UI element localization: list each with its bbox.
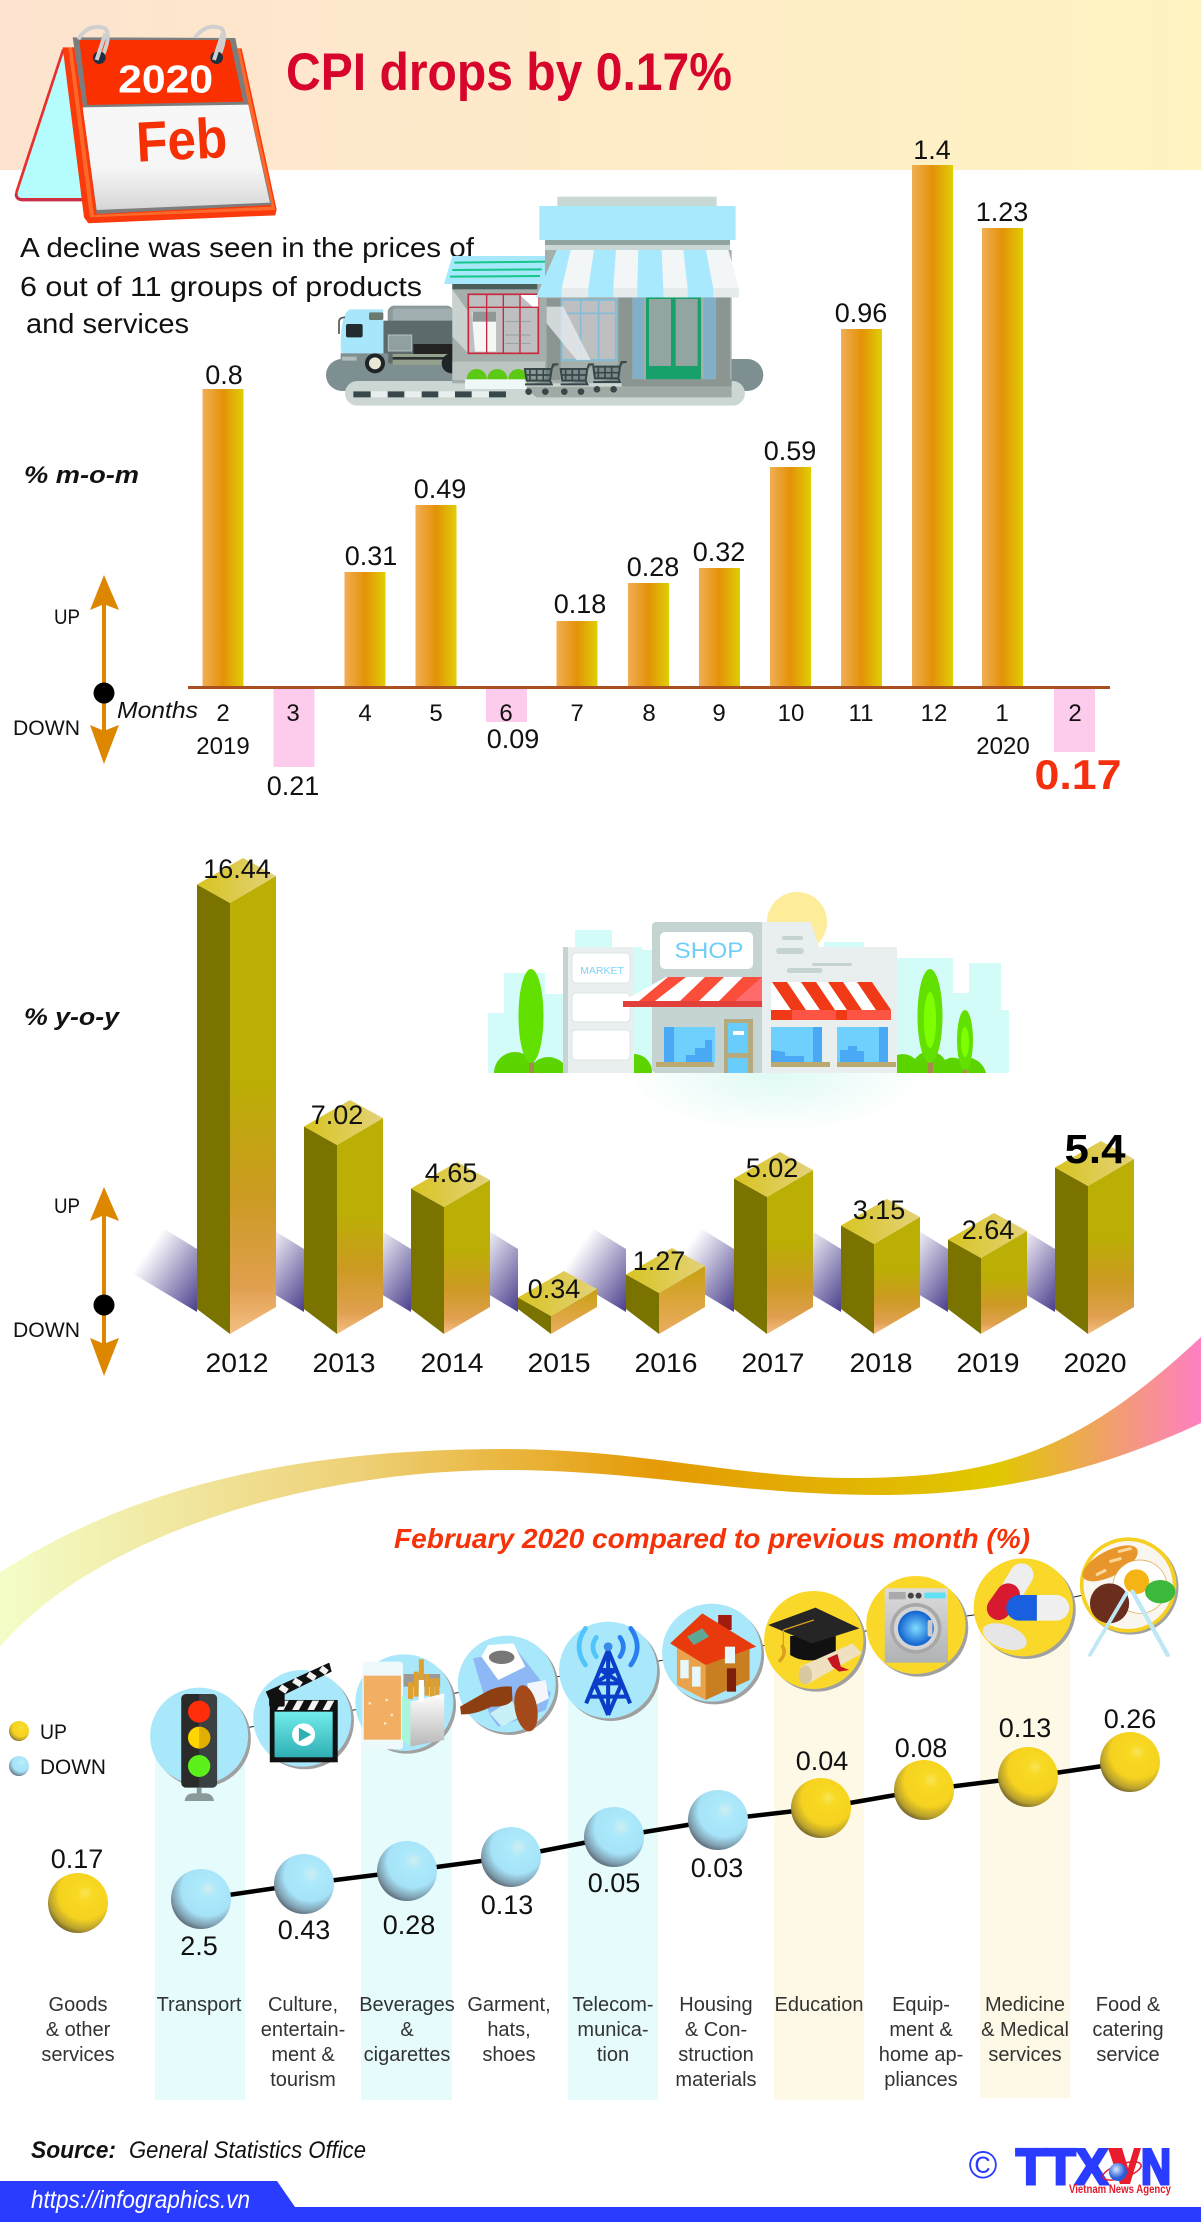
icon: clapperboard (253, 1663, 354, 1769)
chart: yearly CPI 3D columns: 2019 (956, 1348, 1020, 1378)
category labels: materials (675, 2069, 757, 2091)
legend: DOWN (40, 1756, 106, 1779)
up/down axis arrow: yearly (13, 1187, 119, 1376)
illustration: shop street: MARKET (580, 965, 624, 977)
category labels: shoes (482, 2044, 536, 2066)
chart: yearly CPI 3D columns: 2013 (312, 1348, 376, 1378)
line chart: change by group: 0.26 (1104, 1704, 1156, 1734)
icons row, left group (150, 1622, 660, 1801)
source line (31, 2137, 366, 2164)
chart: yearly CPI 3D columns: 2012 (206, 1348, 268, 1378)
chart: yearly CPI 3D columns: 2017 (742, 1348, 804, 1378)
chart: monthly CPI bars: 11 (849, 700, 873, 727)
logo: TTXVN: N (1141, 2139, 1171, 2195)
category labels: hats, (487, 2019, 531, 2041)
category labels: struction (678, 2044, 754, 2066)
chart: monthly CPI bars: Months (117, 697, 199, 723)
category labels: Garment, (467, 1994, 551, 2016)
up/down axis arrow: yearly: UP (54, 1195, 80, 1218)
source line: General Statistics Office (129, 2137, 366, 2164)
category labels: home ap- (879, 2044, 963, 2066)
icon: drink and cigarettes (355, 1654, 456, 1754)
chart: monthly CPI bars: 0.59 (764, 436, 816, 466)
category labels: Medicine (985, 1994, 1065, 2016)
chart: yearly CPI 3D columns: 2016 (634, 1348, 698, 1378)
intro text: and services (26, 308, 189, 339)
chart: yearly CPI 3D columns: 1.27 (633, 1246, 685, 1276)
chart: monthly CPI bars: 9 (712, 700, 726, 727)
chart: yearly CPI 3D columns: 2018 (850, 1348, 912, 1378)
up/down axis arrow: monthly: DOWN (13, 717, 80, 740)
label: % y-o-y: % y-o-y (24, 1004, 121, 1031)
category labels: ment & (271, 2044, 335, 2066)
line chart: change by group: 0.13 (999, 1713, 1051, 1743)
chart: yearly CPI 3D columns (132, 854, 1134, 1378)
chart: yearly CPI 3D columns: 5.4 (1064, 1126, 1126, 1172)
category labels: catering (1092, 2019, 1164, 2041)
category labels: ment & (889, 2019, 953, 2041)
chart: yearly CPI 3D columns: 16.44 (203, 854, 271, 884)
category labels: cigarettes (364, 2044, 450, 2066)
up/down axis arrow: yearly: DOWN (13, 1319, 80, 1342)
category labels: Culture, (268, 1994, 338, 2016)
chart: monthly CPI bars: 0.09 (487, 724, 539, 754)
icon: washing machine (866, 1576, 968, 1677)
chart: monthly CPI bars: 7 (570, 700, 584, 727)
icon: desk calendar (16, 27, 277, 223)
chart: monthly CPI bars: 2 (216, 700, 230, 727)
logo: TTXVN: TTX (1016, 2139, 1108, 2195)
legend: UP (40, 1721, 67, 1744)
chart: monthly CPI bars: 0.28 (627, 552, 679, 582)
category labels: pliances (884, 2069, 958, 2091)
chart: monthly CPI bars: 0.21 (267, 771, 319, 801)
title: CPI drops by 0.17% (286, 43, 732, 102)
icon: desk calendar: Feb (135, 107, 229, 175)
chart: monthly CPI bars: 2 (1068, 700, 1082, 727)
line chart: change by group: 0.17 (51, 1844, 103, 1874)
illustration: shop street (488, 892, 1009, 1133)
up/down axis arrow: monthly (13, 575, 119, 764)
chart: monthly CPI bars: 1 (995, 700, 1009, 727)
chart: monthly CPI bars: 2019 (196, 733, 250, 760)
icon: house (662, 1604, 764, 1704)
line chart: change by group: 0.08 (895, 1733, 947, 1763)
icon: pills (974, 1558, 1076, 1659)
category labels: services (988, 2044, 1062, 2066)
label: % m-o-m: % m-o-m (24, 462, 139, 489)
chart: yearly CPI 3D columns: 2020 (1064, 1348, 1126, 1378)
intro text (20, 232, 474, 339)
category labels: service (1096, 2044, 1160, 2066)
icon: food plate (1077, 1537, 1178, 1655)
decorative ribbon (0, 1337, 1201, 1647)
chart: yearly CPI 3D columns: 5.02 (746, 1153, 798, 1183)
chart: monthly CPI bars: 3 (286, 700, 300, 727)
footer bar with URL: https://infographics.vn (31, 2186, 250, 2214)
line chart: change by group (48, 1704, 1160, 1961)
chart: monthly CPI bars: 0.8 (205, 360, 243, 390)
up/down axis arrow: monthly: UP (54, 606, 80, 629)
chart: yearly CPI 3D columns: 7.02 (311, 1100, 363, 1130)
icons row, right group (662, 1537, 1178, 1704)
source line: Source: (31, 2137, 116, 2164)
chart: monthly CPI bars (117, 135, 1122, 801)
category labels: Transport (157, 1994, 242, 2016)
category labels: & Con- (685, 2019, 747, 2041)
line chart: change by group: 0.28 (383, 1910, 435, 1940)
category labels: munica- (577, 2019, 649, 2041)
illustration: shop street: SHOP (674, 938, 744, 963)
icon: graduation cap (764, 1591, 866, 1692)
category labels: Goods (49, 1994, 107, 2016)
category labels (41, 1994, 1164, 2091)
intro text: 6 out of 11 groups of products (20, 271, 422, 302)
chart: monthly CPI bars: 6 (499, 700, 513, 727)
chart: yearly CPI 3D columns: 2014 (420, 1348, 484, 1378)
logo: TTXVN: © (969, 2144, 998, 2187)
chart: monthly CPI bars: 10 (778, 700, 804, 727)
category labels: Beverages (359, 1994, 455, 2016)
chart: monthly CPI bars: 0.49 (414, 474, 466, 504)
header band (0, 0, 1201, 170)
icon: shirt and shoes (458, 1636, 558, 1735)
thin connector through icons (200, 1585, 1130, 1736)
chart: yearly CPI 3D columns: 3.15 (853, 1195, 905, 1225)
icon: desk calendar: 2020 (118, 57, 213, 101)
illustration: storefront and truck (326, 197, 763, 406)
category labels: & other (46, 2019, 111, 2041)
line chart: change by group: 2.5 (180, 1931, 218, 1961)
category labels: & (400, 2019, 414, 2041)
chart: monthly CPI bars: 0.96 (835, 298, 887, 328)
chart: monthly CPI bars: 2020 (976, 733, 1030, 760)
chart: yearly CPI 3D columns: 4.65 (425, 1158, 477, 1188)
icon: traffic light (150, 1688, 251, 1801)
chart: monthly CPI bars: 0.31 (345, 541, 397, 571)
chart: monthly CPI bars: 1.23 (976, 197, 1028, 227)
chart: monthly CPI bars: 1.4 (913, 135, 951, 165)
logo: TTXVN (969, 2139, 1171, 2196)
chart: monthly CPI bars: 12 (921, 700, 947, 727)
chart: monthly CPI bars: 0.32 (693, 537, 745, 567)
icon: telecom tower (559, 1622, 660, 1721)
category labels: entertain- (261, 2019, 345, 2041)
category labels: tourism (270, 2069, 336, 2091)
heading: monthly comparison: February 2020 compared to previous month (%) (394, 1523, 1030, 1554)
category labels: tion (597, 2044, 629, 2066)
category labels: Telecom- (572, 1994, 654, 2016)
category labels: Food & (1096, 1994, 1161, 2016)
line chart: change by group: 0.13 (481, 1890, 533, 1920)
category labels: Education (775, 1994, 863, 2016)
line chart: change by group: 0.03 (691, 1853, 743, 1883)
category labels: services (41, 2044, 115, 2066)
chart: yearly CPI 3D columns: 0.34 (528, 1274, 580, 1304)
chart: monthly CPI bars: 5 (429, 700, 443, 727)
category labels: Equip- (892, 1994, 950, 2016)
footer bar with URL (0, 2181, 1201, 2222)
logo: TTXVN: Vietnam News Agency (1069, 2182, 1171, 2196)
chart: monthly CPI bars: 0.18 (554, 589, 606, 619)
legend (9, 1721, 106, 1779)
highlighted columns (155, 1608, 1070, 2100)
intro text: A decline was seen in the prices of (20, 232, 474, 263)
chart: yearly CPI 3D columns: 2.64 (962, 1215, 1014, 1245)
line chart: change by group: 0.04 (796, 1746, 848, 1776)
line chart: change by group: 0.05 (588, 1868, 640, 1898)
line chart: change by group: 0.43 (278, 1915, 330, 1945)
category labels: & Medical (981, 2019, 1069, 2041)
chart: yearly CPI 3D columns: 2015 (528, 1348, 590, 1378)
category labels: Housing (679, 1994, 753, 2016)
chart: monthly CPI bars: 8 (642, 700, 656, 727)
chart: monthly CPI bars: 0.17 (1034, 751, 1122, 798)
chart: monthly CPI bars: 4 (358, 700, 372, 727)
